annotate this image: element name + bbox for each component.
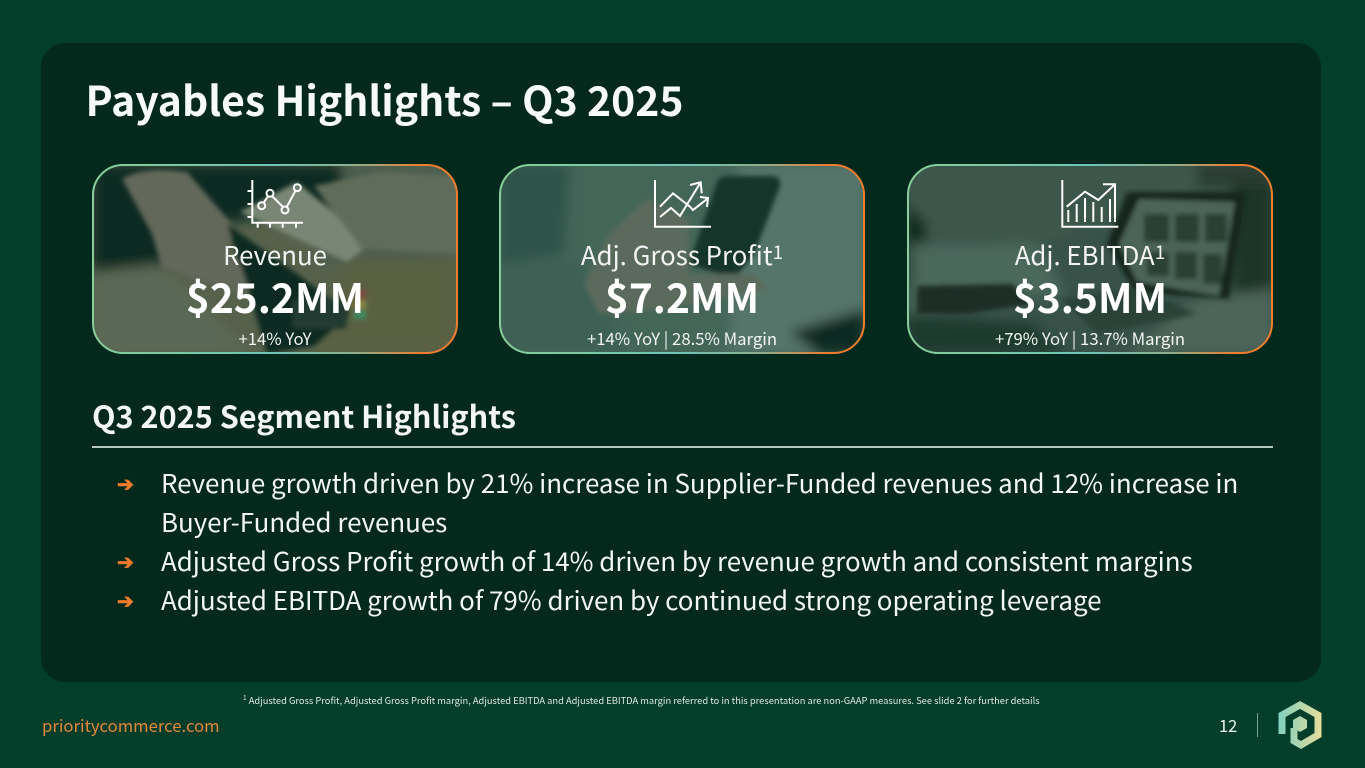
bullet 1 continuation: Buyer-Funded revenues	[161, 502, 447, 540]
value: $3.5MM	[1013, 266, 1167, 325]
subtext: +14% YoY | 28.5% Margin	[587, 326, 777, 350]
bullet 2 arrow: ➔	[117, 546, 134, 575]
icon: logo	[1278, 701, 1322, 749]
page number: 12	[1219, 713, 1237, 737]
bullet list	[117, 464, 1238, 618]
bullet 1 arrow: ➔	[117, 468, 134, 497]
website: prioritycommerce.com	[42, 713, 220, 737]
label: Adj. Gross Profit1	[581, 236, 783, 273]
footnote: 1 Adjusted Gross Profit, Adjusted Gross Profit margin, Adjusted EBITDA and Adjusted EBITDA margin referred to in this presentation are non-GAAP measures. See slide 2 for further details	[243, 692, 1040, 707]
icon: bar chart with arrow	[1061, 180, 1118, 228]
icon: trend arrows	[654, 180, 711, 228]
label: Adj. EBITDA1	[1015, 236, 1165, 273]
bullet 3 text: Adjusted EBITDA growth of 79% driven by continued strong operating leverage	[161, 580, 1102, 618]
main panel	[41, 43, 1321, 682]
title: Payables Highlights – Q3 2025	[86, 69, 684, 128]
subtext: +79% YoY | 13.7% Margin	[995, 326, 1185, 350]
bullet 1 text: Revenue growth driven by 21% increase in Supplier-Funded revenues and 12% increase in	[161, 464, 1238, 500]
section heading: Q3 2025 Segment Highlights	[92, 393, 516, 437]
card: adjusted gross profit	[499, 164, 865, 354]
bullet 2 text: Adjusted Gross Profit growth of 14% driven by revenue growth and consistent margins	[161, 542, 1193, 578]
subtext: +14% YoY	[238, 326, 312, 350]
card: adjusted EBITDA	[907, 164, 1273, 354]
value: $25.2MM	[186, 266, 364, 325]
value: $7.2MM	[605, 266, 759, 325]
card: revenue	[92, 164, 458, 354]
bullet 3 arrow: ➔	[117, 585, 134, 614]
icon: line chart	[248, 180, 303, 228]
label: Revenue	[223, 236, 327, 273]
